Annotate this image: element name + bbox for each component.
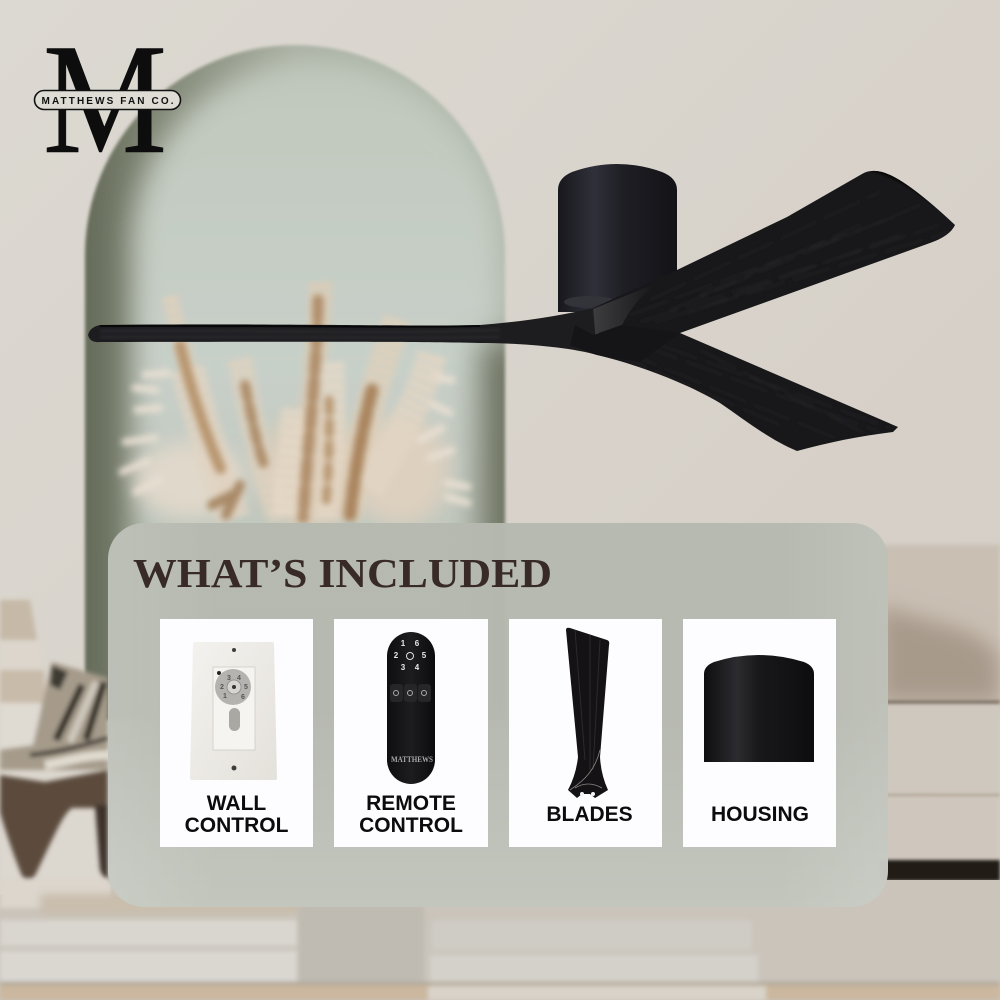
logo name pill [34, 90, 180, 110]
panel: what's included [108, 523, 888, 907]
wall control image: 4 [237, 675, 241, 682]
wall control image [190, 642, 277, 780]
floor with window light [0, 878, 1000, 1000]
arched wall niche [85, 40, 515, 730]
blades label: BLADES [546, 803, 633, 826]
card: housing [683, 619, 836, 847]
heading: WHAT’S INCLUDED [133, 550, 552, 596]
remote image: MATTHEWS [391, 755, 433, 764]
ceiling fan [88, 164, 958, 451]
remote image: 3 [401, 663, 406, 672]
remote image: 4 [415, 663, 420, 672]
pampas grass [122, 283, 468, 530]
right sofa [880, 545, 1000, 881]
wall control image: 1 [223, 693, 227, 700]
wall control label [185, 792, 289, 837]
left sofa and blanket [0, 600, 108, 890]
left long blade [88, 308, 597, 355]
wall control image: 6 [241, 694, 245, 701]
wall control label: WALL [207, 792, 266, 815]
card: blades [509, 619, 662, 847]
remote image [387, 632, 435, 784]
housing label: HOUSING [711, 803, 809, 826]
wall control image: 5 [244, 684, 248, 691]
lower right blade [590, 333, 898, 451]
wall control label: CONTROL [185, 814, 289, 837]
upper right blade [593, 168, 958, 338]
fan housing [558, 164, 677, 312]
remote control label [359, 792, 463, 837]
remote image: 1 [401, 639, 406, 648]
remote control label: REMOTE [366, 792, 456, 815]
remote image: 5 [422, 651, 427, 660]
card: wall control [160, 619, 313, 847]
logo letter M: M [43, 12, 167, 187]
card: remote control [334, 619, 488, 847]
logo: Matthews Fan Co. [34, 12, 180, 187]
housing image [704, 655, 814, 762]
fan hub join [570, 325, 680, 362]
remote image: 6 [415, 639, 420, 648]
remote image: 2 [394, 651, 399, 660]
remote control label: CONTROL [359, 814, 463, 837]
blade image [566, 628, 609, 798]
wall control image: 2 [220, 684, 224, 691]
wall control image: 3 [227, 675, 231, 682]
logo name pill: MATTHEWS FAN CO. [42, 96, 174, 107]
